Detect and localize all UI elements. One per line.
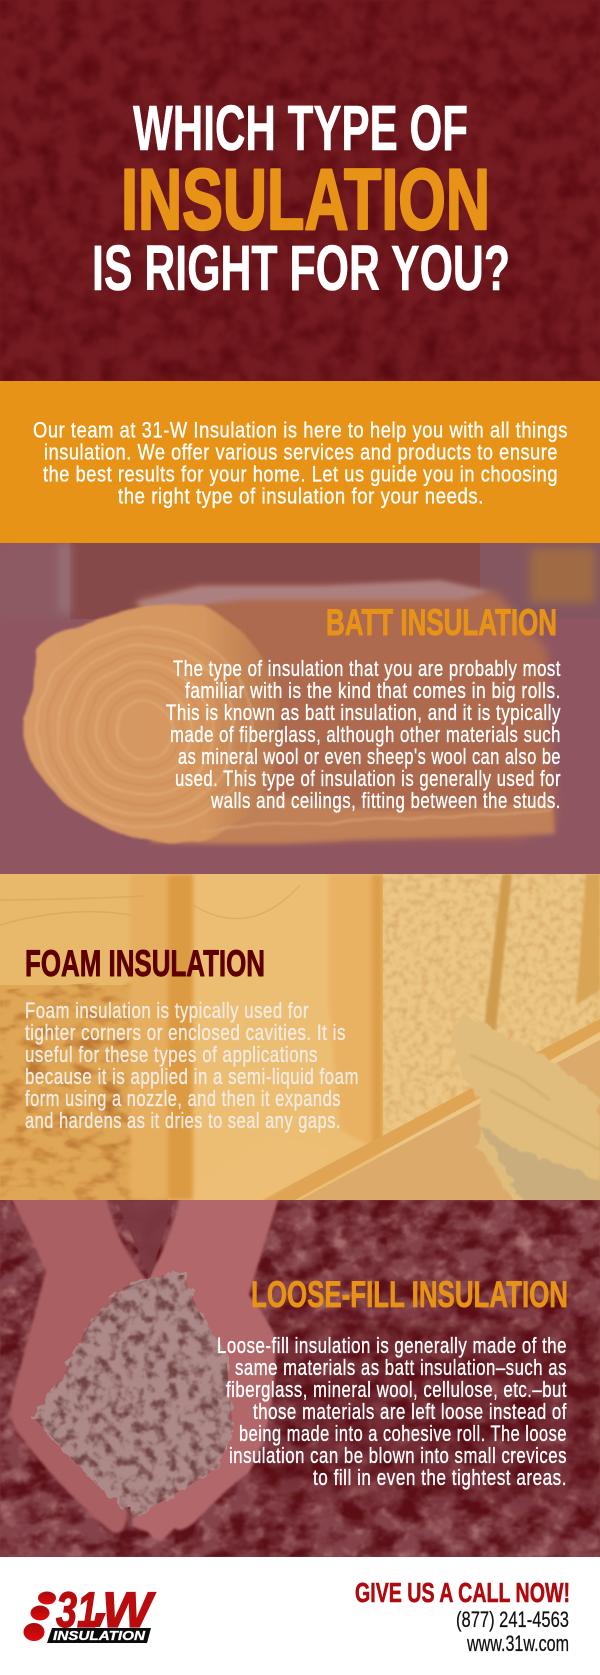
photo: spray foam between studs [0, 874, 600, 1210]
body text: foam insulation: useful for these types of applications [25, 1042, 318, 1067]
body text: foam insulation [25, 998, 359, 1133]
body text: foam insulation: because it is applied in a semi-liquid foam [25, 1064, 359, 1089]
intro text [33, 418, 568, 508]
title [92, 92, 510, 304]
logo: 31-W Insulation: INSULATION [53, 1628, 146, 1643]
panel: footer [0, 1557, 600, 1675]
body text: foam insulation: tighter corners or enclosed cavities. It is [25, 1020, 346, 1045]
body text: foam insulation: Foam insulation is typically used for [25, 998, 309, 1023]
heading: foam insulation: FOAM INSULATION [25, 943, 265, 984]
body text: foam insulation: form using a nozzle, and then it expands [25, 1086, 341, 1111]
body text: batt insulation [166, 656, 561, 813]
photo: hands holding loose-fill [0, 1198, 600, 1557]
panel: title header [0, 0, 600, 381]
body text: loose-fill insulation [217, 1333, 567, 1490]
logo: 31-W Insulation: W [102, 1582, 156, 1638]
intro text: the right type of insulation for your needs. [118, 484, 484, 508]
panel: loose-fill insulation [0, 1198, 600, 1557]
logo: 31-W Insulation: 31 [56, 1582, 98, 1638]
panel: batt insulation [0, 543, 600, 874]
photo: rolled batt insulation [0, 543, 600, 874]
logo: 31-W Insulation [24, 1582, 156, 1643]
panel: intro band [0, 381, 600, 543]
panel: foam insulation [0, 874, 600, 1210]
body text: foam insulation: and hardens as it dries to seal any gaps. [25, 1108, 341, 1133]
textured dark red background [0, 0, 600, 381]
